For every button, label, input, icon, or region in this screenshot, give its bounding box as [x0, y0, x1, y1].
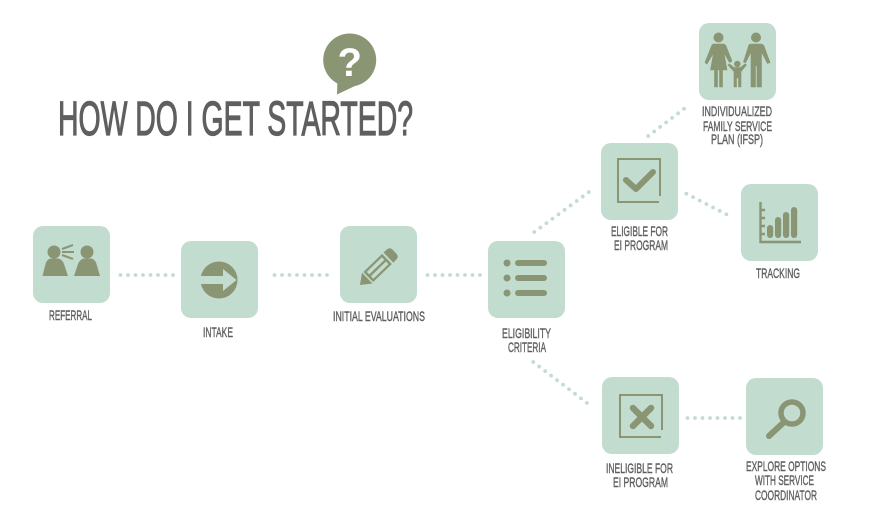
connector: eligible to IFSP	[648, 105, 689, 136]
step: explore options with service coordinator: COORDINATOR	[755, 487, 817, 503]
connector: initial evaluations to eligibility criteria	[428, 273, 480, 277]
connector: ineligible to explore options	[688, 416, 740, 420]
icon: crossed box	[620, 395, 662, 437]
label: REFERRAL	[49, 307, 92, 323]
label: TRACKING	[756, 265, 800, 281]
step: explore options with service coordinator: WITH SERVICE	[755, 472, 814, 488]
connector: referral to intake	[120, 273, 173, 277]
step: eligibility criteria	[488, 241, 565, 355]
icon: bar chart	[760, 202, 801, 242]
step: eligibility criteria: CRITERIA	[508, 339, 546, 355]
icon: magnifying glass	[769, 402, 803, 436]
step: eligible for EI program: EI PROGRAM	[614, 237, 668, 253]
step: ineligible for EI program: EI PROGRAM	[613, 474, 668, 490]
label: ELIGIBILITY	[502, 325, 551, 341]
label: INITIAL EVALUATIONS	[333, 308, 425, 324]
icon: question speech bubble	[323, 34, 376, 94]
connector: eligibility criteria to eligible	[534, 192, 589, 232]
step: individualized family service plan: FAMILY SERVICE	[703, 118, 772, 134]
step: explore options with service coordinator	[746, 378, 826, 503]
connector: eligible to tracking	[686, 194, 732, 217]
label: INELIGIBLE FOR	[606, 460, 673, 476]
icon: question speech bubble: ?	[337, 41, 362, 85]
icon: arrow in circle	[200, 262, 238, 298]
label: INTAKE	[203, 324, 233, 340]
step: eligible for EI program	[601, 143, 678, 253]
step: tracking	[741, 184, 818, 281]
label: INDIVIDUALIZED	[702, 103, 772, 119]
icon: pencil	[355, 246, 400, 290]
icon: family	[705, 32, 770, 87]
step: individualized family service plan: PLAN (IFSP)	[711, 131, 763, 147]
icon: two people talking	[42, 245, 100, 276]
connector: intake to initial evaluations	[274, 273, 327, 277]
icon: checked box	[618, 159, 660, 202]
icon: list	[504, 260, 547, 296]
step: individualized family service plan	[699, 23, 776, 147]
step: ineligible for EI program	[602, 377, 679, 490]
label: ELIGIBLE FOR	[611, 223, 668, 239]
title: HOW DO I GET STARTED?	[58, 93, 413, 146]
step: initial evaluations	[333, 226, 425, 324]
step: intake	[181, 241, 258, 340]
step: referral	[33, 226, 110, 323]
connector: eligibility criteria to ineligible	[533, 362, 587, 403]
